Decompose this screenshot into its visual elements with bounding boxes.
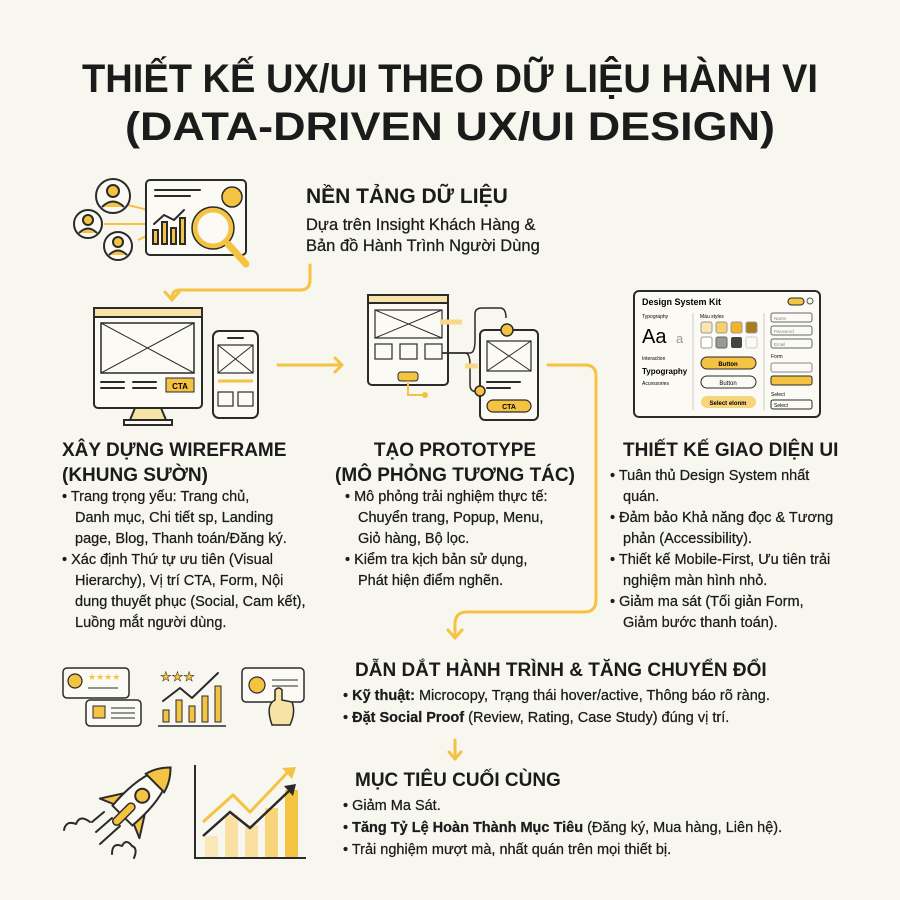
arrow: data to wireframe [165, 265, 310, 300]
icon: design system kit: Email [774, 342, 785, 347]
icon: design system kit: Typography [642, 314, 669, 320]
icon: design system kit: a [676, 331, 684, 346]
arrow: prototype to UI and down to journey [448, 365, 596, 638]
section: wireframe: page, Blog, Thanh toán/Đăng ký. [75, 531, 287, 547]
icon: design system kit: Aa [642, 326, 667, 348]
section: final goals: • Tăng Tỷ Lệ Hoàn Thành Mục Tiêu (Đăng ký, Mua hàng, Liên hệ). [343, 820, 782, 836]
icon: wireframe devices [94, 308, 258, 425]
icon: design system kit: Name [774, 316, 787, 321]
icons: social proof: ★★★★ [88, 672, 120, 682]
heading: data foundation: Dựa trên Insight Khách Hàng & [306, 216, 535, 234]
section: wireframe: Hierarchy), Vị trí CTA, Form, Nội [75, 573, 283, 589]
section: final goals [343, 769, 782, 858]
section: prototype: • Mô phỏng trải nghiệm thực tế: [345, 489, 548, 505]
icon: design system kit: Password [774, 329, 794, 334]
arrow: wireframe to prototype [278, 358, 342, 372]
section: journey and conversion: • Đặt Social Proof (Review, Rating, Case Study) đúng vị trí. [343, 710, 729, 726]
section: prototype [335, 440, 575, 589]
icon: growth chart [195, 765, 306, 858]
icon: design system kit: Select elonm [709, 401, 747, 407]
title: (DATA-DRIVEN UX/UI DESIGN) [125, 105, 775, 149]
section: UI design [610, 439, 838, 631]
title [82, 55, 818, 149]
section: prototype: Giỏ hàng, Bộ lọc. [358, 531, 469, 547]
section: journey and conversion: • Kỹ thuật: Microcopy, Trạng thái hover/active, Thông báo rõ ràng. [343, 688, 770, 704]
section: prototype: TẠO PROTOTYPE [374, 440, 536, 461]
section: UI design: Giảm bước thanh toán). [623, 615, 778, 631]
section: wireframe: • Xác định Thứ tự ưu tiên (Visual [62, 552, 273, 568]
section: wireframe: dung thuyết phục (Social, Cam kết), [75, 594, 306, 610]
section: prototype: Chuyển trang, Popup, Menu, [358, 510, 543, 526]
icon: design system kit: Interaction [642, 356, 666, 362]
icon: wireframe devices: CTA [172, 382, 188, 391]
heading: data foundation: Bản đồ Hành Trình Người Dùng [306, 237, 540, 255]
icon: design system kit: Màu styles [700, 314, 724, 320]
section: final goals: • Giảm Ma Sát. [343, 798, 441, 814]
section: journey and conversion: DẪN DẮT HÀNH TRÌNH & TĂNG CHUYỂN ĐỔI [355, 659, 767, 681]
heading: data foundation: NỀN TẢNG DỮ LIỆU [306, 184, 508, 208]
icon: design system kit: Typography [642, 367, 688, 376]
icon: design system kit: Select [774, 403, 789, 409]
section: UI design: phản (Accessibility). [623, 531, 752, 547]
section: final goals: • Trải nghiệm mượt mà, nhất quán trên mọi thiết bị. [343, 842, 671, 858]
icon: prototype screens: CTA [502, 404, 516, 411]
icon: data analytics [74, 179, 246, 264]
heading: data foundation [306, 184, 540, 255]
section: final goals: MỤC TIÊU CUỐI CÙNG [355, 769, 561, 791]
icon: design system kit: Button [719, 381, 737, 387]
title: THIẾT KẾ UX/UI THEO DỮ LIỆU HÀNH VI [82, 55, 818, 101]
section: UI design: • Giảm ma sát (Tối giản Form, [610, 594, 804, 610]
section: UI design: • Tuân thủ Design System nhất [610, 468, 809, 484]
section: wireframe: • Trang trọng yếu: Trang chủ, [62, 489, 249, 505]
section: wireframe [62, 439, 306, 631]
section: journey and conversion [343, 659, 770, 726]
section: UI design: nghiệm màn hình nhỏ. [623, 573, 767, 589]
section: wireframe: Luồng mắt người dùng. [75, 614, 226, 631]
icon: design system kit: Form [771, 354, 783, 360]
icon: design system kit [634, 291, 820, 417]
icons: social proof [63, 668, 304, 726]
icons: social proof: ★★★ [160, 669, 195, 684]
icon: prototype screens [368, 295, 538, 420]
icon: design system kit: Select [771, 392, 786, 398]
section: UI design: THIẾT KẾ GIAO DIỆN UI [623, 439, 838, 461]
section: UI design: quán. [623, 489, 659, 505]
section: wireframe: (KHUNG SƯỜN) [62, 464, 208, 486]
section: UI design: • Thiết kế Mobile-First, Ưu tiên trải [610, 552, 830, 568]
icon: design system kit: Design System Kit [642, 297, 721, 307]
icon: design system kit: Accessories [642, 381, 669, 387]
section: prototype: (MÔ PHỎNG TƯƠNG TÁC) [335, 464, 575, 486]
section: wireframe: XÂY DỰNG WIREFRAME [62, 439, 286, 461]
section: prototype: Phát hiện điểm nghẽn. [358, 573, 503, 589]
section: prototype: • Kiểm tra kịch bản sử dụng, [345, 552, 527, 568]
section: wireframe: Danh mục, Chi tiết sp, Landing [75, 510, 273, 526]
icon: rocket [64, 748, 190, 858]
icon: design system kit: Button [718, 362, 738, 368]
arrow: journey to goals [449, 740, 461, 759]
section: UI design: • Đảm bảo Khả năng đọc & Tương [610, 510, 833, 526]
